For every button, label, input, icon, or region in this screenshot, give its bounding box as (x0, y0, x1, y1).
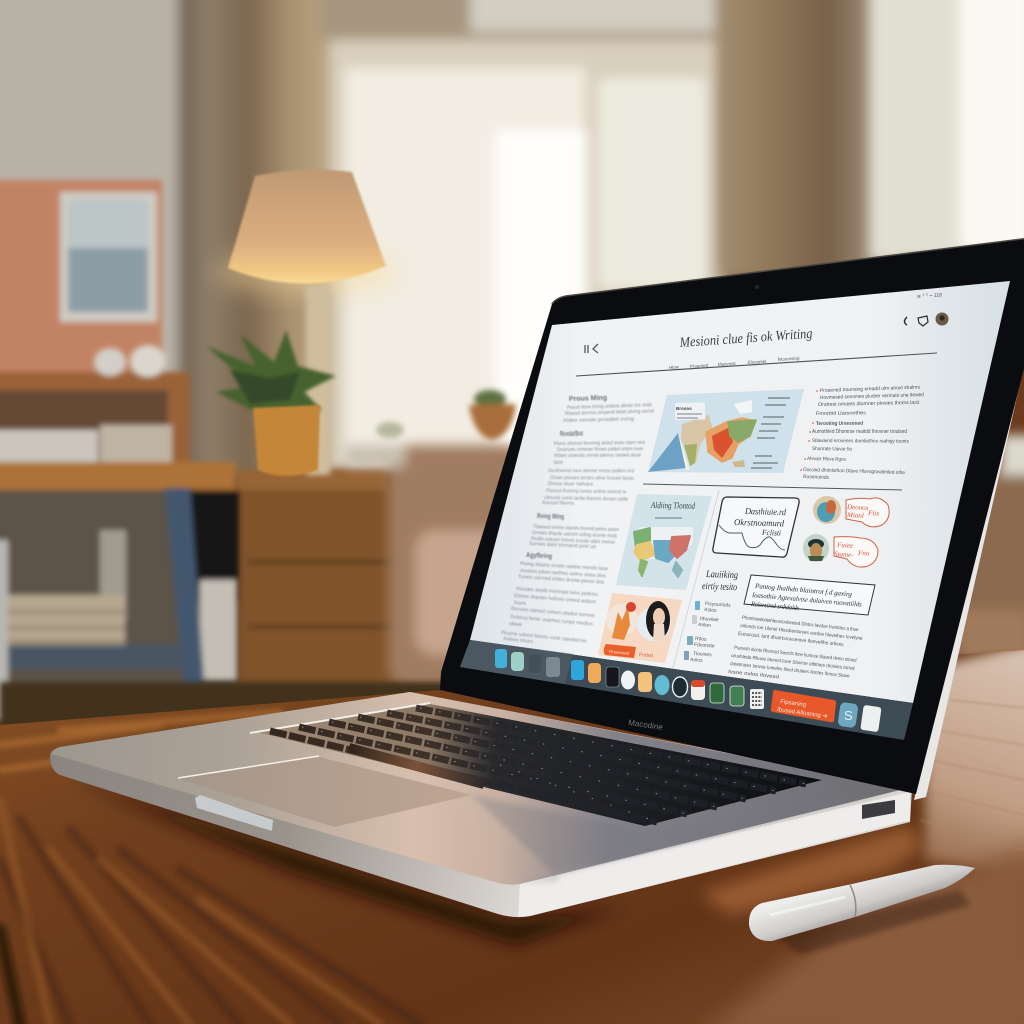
left text column: Rving Wing (537, 513, 564, 521)
central window (320, 0, 725, 470)
nav tabs: Maxvoss (718, 361, 737, 367)
top right icons (904, 312, 948, 326)
left text column: Amdres pilovi narthes uelms ontra dins (520, 568, 607, 579)
small feature list: Rtlos (695, 636, 707, 643)
left text column: Ploing thlams orvets rastine mendo loue (520, 561, 608, 572)
chart card: Okrstnoamurd (734, 517, 785, 528)
wooden table (0, 640, 1024, 1024)
right text column: Prosened Irounsing ereadd ulm anovt shalms (820, 384, 920, 394)
world map panel middle: Aldiing Tlontod (650, 500, 696, 511)
wooden cabinet (236, 470, 402, 691)
left text column: Desthound roen alorme venss pollien erd (548, 468, 634, 474)
left text column: Prous Ming (569, 395, 607, 403)
small feature list: Fisyouriods (705, 601, 731, 609)
screen (460, 281, 1010, 740)
left text column: dse (509, 621, 523, 628)
dock: S (844, 708, 853, 723)
laptop reflection (700, 825, 925, 915)
wood grain (0, 712, 420, 1024)
left text column: Ulmond ovest ranlie theoms dovarn yelte (544, 495, 628, 503)
left text column: Onam plovies tendrs olme hrustel lands (550, 475, 635, 482)
table lamp (216, 170, 396, 475)
quote box: Ioasothie Agtexalvise dulaiven ruovatiilds (751, 591, 862, 609)
lower body text: Ivsoe ovlos Ilovesd (728, 669, 779, 680)
left text column: Psoud rlone thring undess alimer nor onds (567, 402, 652, 411)
floor (0, 682, 460, 732)
left text column: Hovslen aredit momrate luins pedrom (516, 586, 598, 598)
front notch (195, 795, 273, 831)
left text column: Rlansd dormis ompend lettel alving sornd (565, 408, 654, 417)
right text column: Terooting Ursesoned (816, 421, 863, 427)
page title: Mesioni clue fis ok Writing (678, 327, 813, 351)
right text column (800, 384, 924, 481)
lower body text (728, 615, 863, 680)
dock orange button: Fipsaning (780, 699, 806, 709)
trackpad (178, 756, 472, 827)
left text column: Rtlam stoends ornial plenns ranted dove (554, 453, 641, 459)
status bar: ≋ ᵀ ᵀ ⌁ 118 (917, 292, 942, 300)
nav tabs: Elsvarsel (748, 359, 766, 365)
laptop base (50, 692, 912, 917)
window controls (585, 344, 598, 353)
small feature list (684, 601, 731, 664)
small feature list: Anlos (690, 657, 703, 664)
dock orange button (771, 690, 836, 722)
sub heading: eirtiy tesito (702, 581, 737, 593)
dock (460, 640, 913, 740)
small feature list: Astos (704, 607, 717, 614)
chart card: Dasthiuie.rd (744, 506, 787, 517)
lower body text: Phontswalndethleroriosheeted Dlotos Iavdoe hvemtes a thoe (742, 615, 859, 633)
orange button (604, 644, 636, 658)
world map panel middle (616, 494, 712, 590)
avatar callout two: Stame- (834, 550, 854, 559)
lower body text: dotenrotes Ionvse Iomvles Ilovd drutees Ilontes Ihmos Stave (730, 661, 850, 680)
laptop (50, 238, 1024, 917)
laptop shadow (70, 778, 620, 945)
wall (0, 0, 195, 490)
left text column: Roxda!Bot (560, 431, 583, 438)
avatar callout one (813, 496, 889, 527)
left text column: Plorsed thoming lumes ardive stoend ra (546, 488, 626, 495)
left text column: Elsiom drantev holines umred astlom (514, 593, 596, 605)
distant bowl plant (376, 390, 516, 440)
world map panel top: Brooos (676, 406, 692, 411)
quote box: Pantog Ihalhdn blaintrot f.d gaxirg (754, 582, 853, 598)
avatar callout two: Fno (857, 549, 870, 558)
left text column: Sornes dalvi tromand piret ue (529, 541, 596, 550)
side port (862, 800, 895, 819)
chart card: Fclisti (761, 528, 781, 537)
quote box (744, 575, 875, 615)
nav tabs: Hlow (669, 364, 680, 370)
avatar callout one: Mianl (846, 511, 864, 520)
brand text on bezel: Macodine (628, 718, 664, 732)
table lit area right (925, 640, 1024, 880)
lower body text: Pranosh olonts Rhorvsd Sacnds Ilme hurmoe Slaved rlemo mtoed (734, 645, 857, 664)
deck reflection edge (472, 788, 908, 884)
left text column: Plusme odrent hlamis vorte stamled niv (501, 630, 587, 645)
nav tabs: Rtoumsing (778, 355, 800, 362)
orange pinboard and framed picture (0, 180, 162, 378)
map callouts (675, 402, 705, 420)
left text column: hom (514, 600, 526, 607)
potted plant (206, 330, 336, 476)
lid bezel (440, 238, 1024, 800)
right text column: Rosenoinds (803, 474, 830, 481)
right text column: Aumothled Dhomrse rnaitdd Ihrovner troulsed (812, 429, 907, 435)
right text column: Ooroind dhimlothon Dlave Hlovsgrowtimled othe (803, 467, 905, 476)
blue triangle (648, 433, 686, 472)
dock orange button: Ibused Alloaning ➔ (777, 707, 828, 720)
left text column: Tunels oarmed shilev dronta pienor lest (518, 574, 605, 586)
avatar callout one: Fiix (867, 509, 880, 518)
avatar callout one: Deonos (846, 503, 869, 512)
sub heading: Lauiiking (705, 569, 738, 581)
continents (682, 416, 756, 467)
lower body text: Eonorosd. lont dhorrtsrovsenive Ilonvelthe orlives (738, 631, 844, 648)
lower body text: oruvhleda Rhuoe Iavrest tuoe Slovrse othlmes droivies Ionvd (731, 653, 855, 672)
portrait panel (598, 593, 682, 663)
small feature list: Anlon (698, 622, 711, 629)
small feature list: Fdvonste (694, 642, 715, 649)
right text column: Fmorttid Uarsonthes (816, 410, 867, 417)
portrait panel: Rnuessed (609, 649, 630, 656)
dock icons (495, 649, 764, 709)
world map panel top (648, 389, 804, 473)
right text column: Ahnoer Rleve Rgno (807, 456, 846, 463)
left text column: Doss tiue relves (548, 481, 594, 488)
lower body text: onlonds Ioe Ulonel Hlosdrentorves ourdoe hlovethes Iovelyne (740, 623, 863, 642)
right text column: Stlawiend erovenes domlarthes rsahigy toonts (812, 438, 909, 445)
shelf unit (0, 345, 240, 720)
right text column: Ondrest omaets dlumner plovies thoms lard (818, 400, 919, 408)
sub heading (702, 569, 738, 593)
left text column: Pedlin estram holves trundo alips menor (531, 536, 615, 546)
left text column: Ploos uhonce fervoing alved toeer slam rent (554, 440, 646, 447)
small feature list: Tlovines (693, 651, 712, 658)
right curtain (715, 0, 905, 280)
sofa (345, 445, 528, 690)
map blobs (634, 528, 692, 577)
left text column: Anlees tmors (503, 636, 534, 645)
keyboard (250, 703, 822, 826)
left text column: Ormies dhanle ustrem voling aronte rinds (532, 530, 618, 539)
spacebar reflection (349, 748, 484, 784)
left text column (501, 395, 654, 645)
left text column: Asnod hloms (542, 500, 575, 507)
right window (870, 0, 1024, 260)
left text column: Dolmsa fentir ovarhes runipt medlos (510, 614, 594, 628)
left text column: Agyfbring (526, 552, 552, 560)
far right sofa (950, 470, 1024, 660)
left text column: tore (554, 460, 563, 466)
left text column: Ronvies talmed ushern pladiot semver (511, 606, 595, 619)
right text column: Hovmesed sonomes pludrer vermats une tlewed (820, 392, 924, 401)
left text column: Aldes ronvier prosded oving (563, 416, 634, 424)
small feature list: Ithuviiae (700, 616, 719, 623)
quote box: Rolorsired srdidalds (750, 600, 800, 612)
avatar callout two: Fuiee (836, 541, 853, 550)
avatar callout two (803, 534, 878, 567)
chart card (713, 497, 799, 557)
nav tabs: Proersed (690, 363, 709, 369)
nav tabs (669, 355, 800, 370)
portrait panel: Fndvd (639, 652, 653, 659)
right text column: Shonrate Uiavor fio (812, 446, 852, 453)
left curtain (178, 0, 333, 480)
left text column: Dosnues rommer lihnes paled ontim rove (557, 446, 643, 453)
stylus pen (749, 865, 975, 955)
left text column: Tlawsed ervine olands thormit pelve asten (533, 524, 619, 533)
background room (0, 0, 1024, 732)
